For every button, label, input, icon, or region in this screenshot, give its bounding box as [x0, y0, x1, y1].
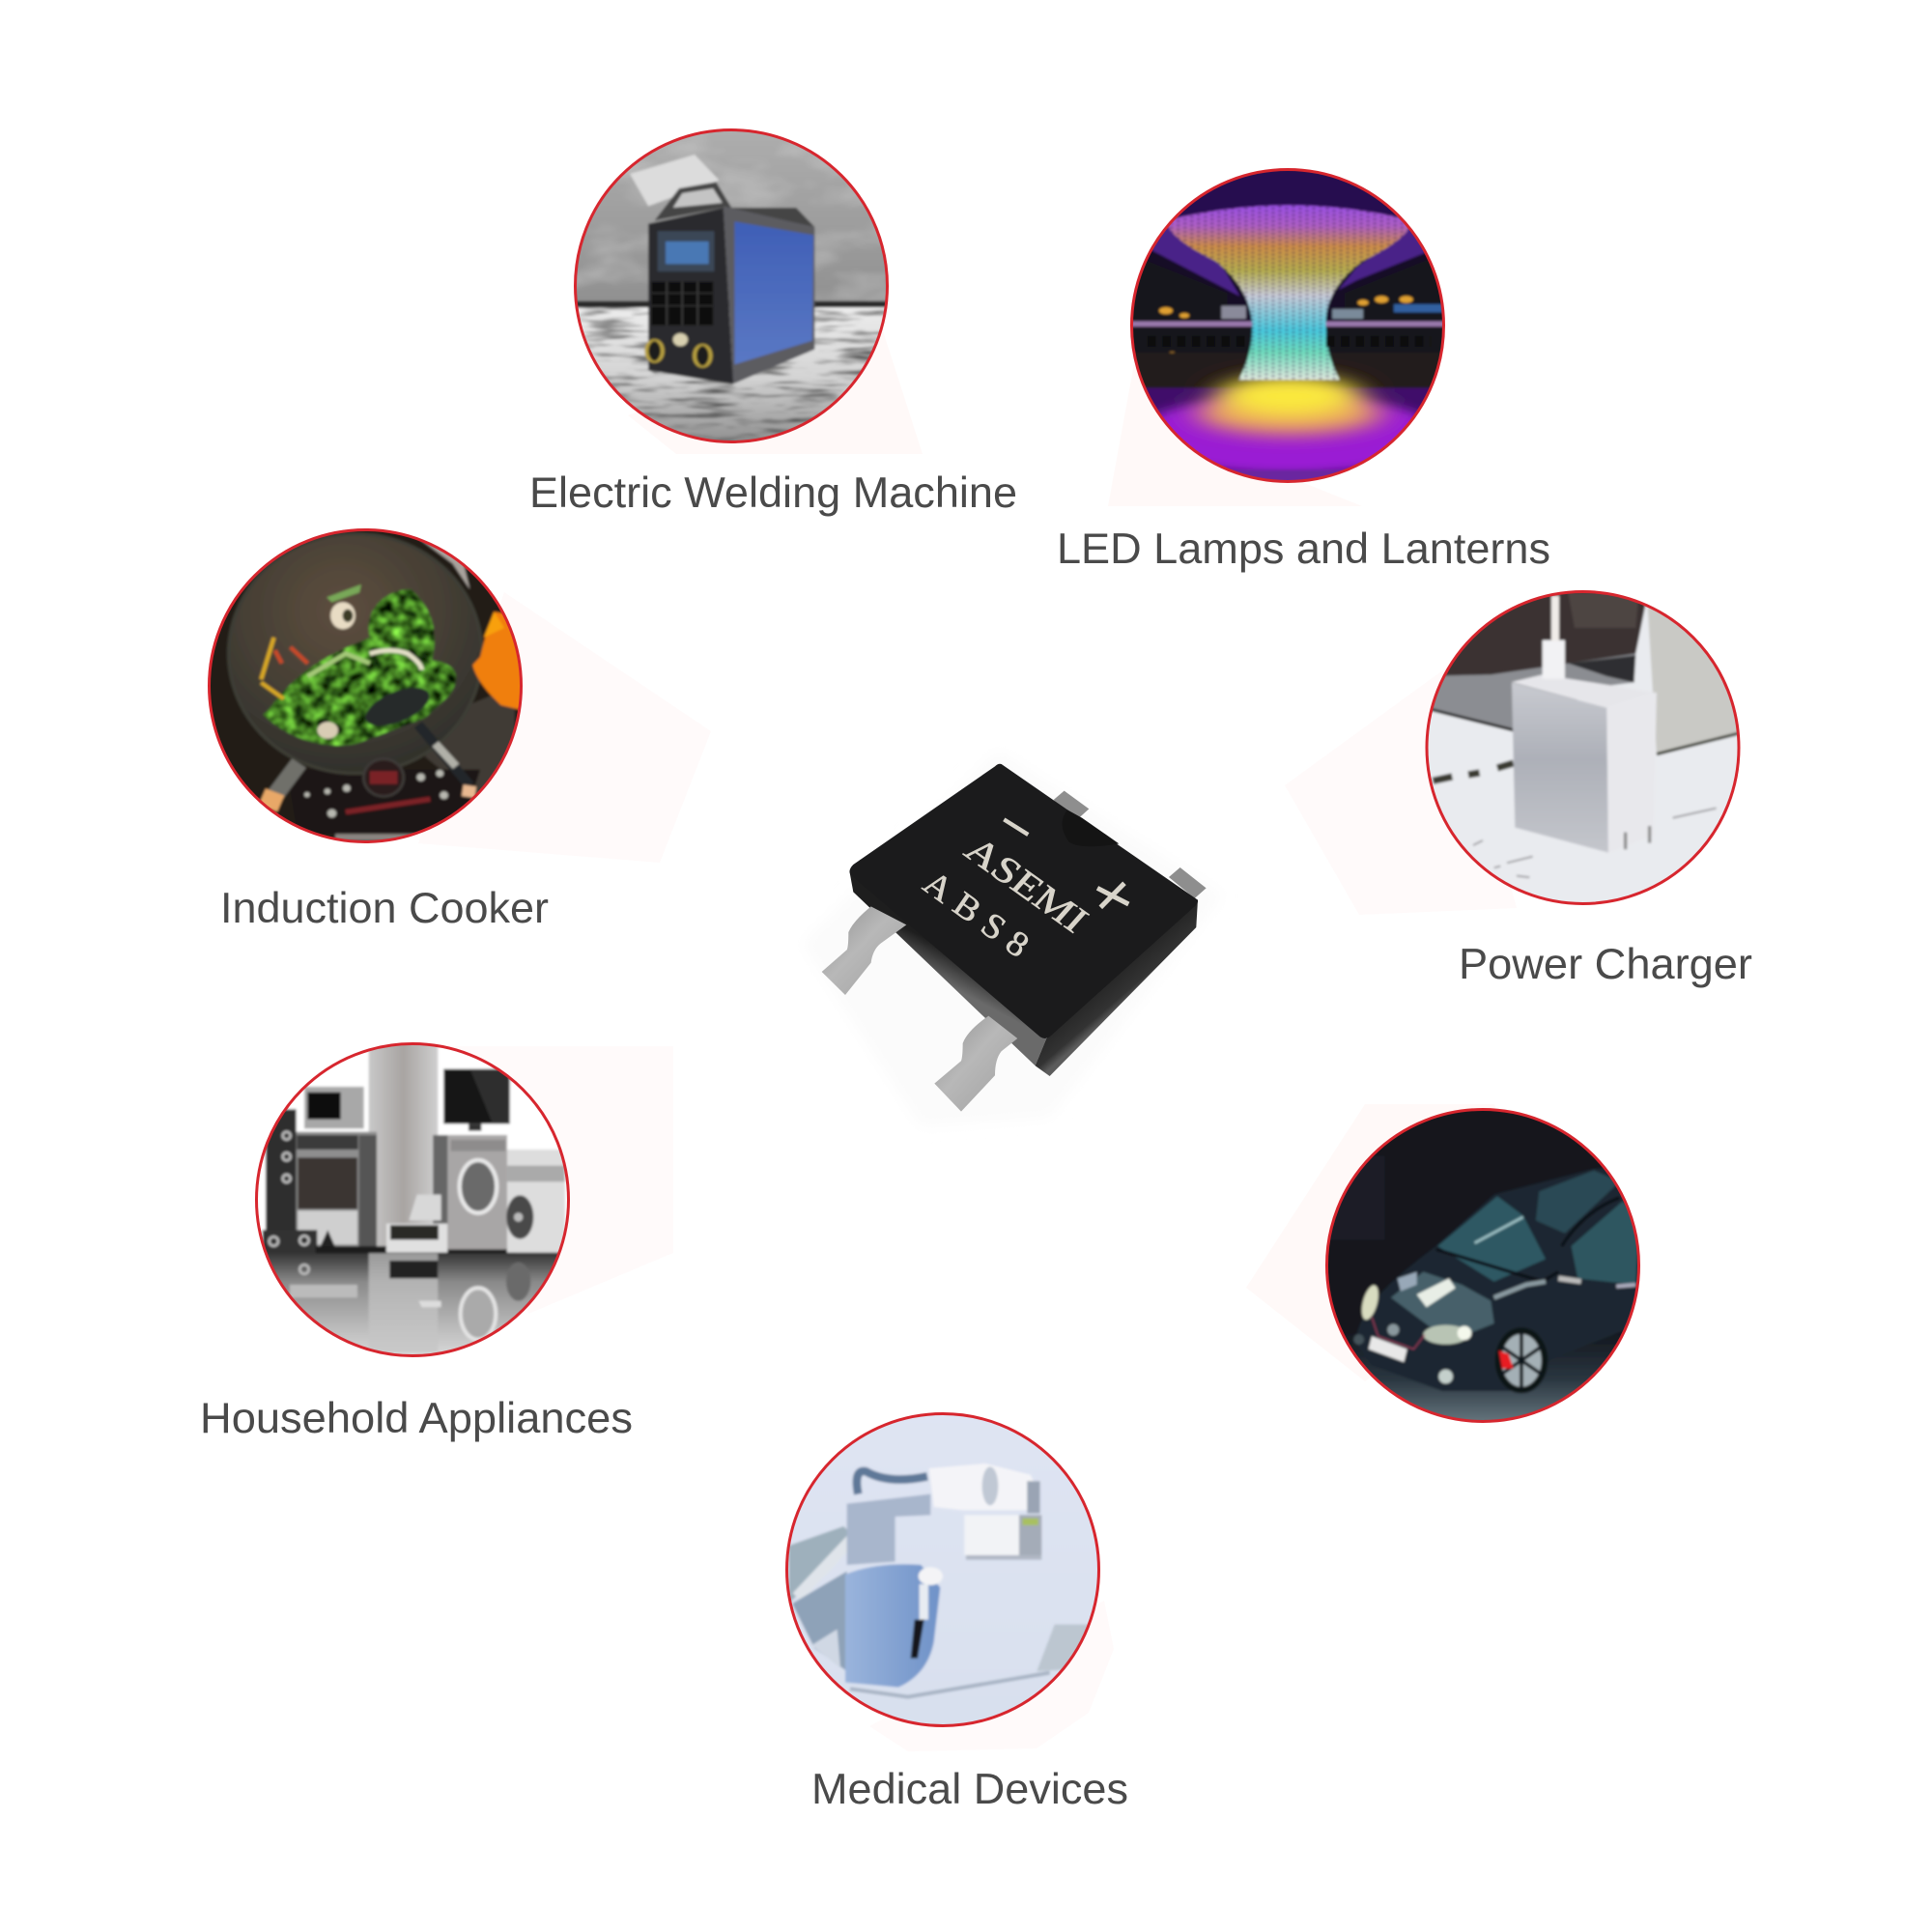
panel: Induction Cooker — [208, 528, 549, 923]
panel: Power Charger — [1426, 590, 1752, 987]
photo: LED funnel — [1122, 167, 1449, 490]
brand text: ASEMI — [956, 830, 1096, 941]
photo: cutaway car — [1323, 1108, 1642, 1423]
corner notch — [1063, 810, 1119, 846]
red ring — [1132, 170, 1443, 481]
photo: white charger — [1423, 589, 1746, 911]
red ring — [257, 1043, 568, 1356]
label: Power Charger — [1459, 941, 1752, 988]
pink shadow — [628, 319, 923, 454]
top face — [850, 764, 1198, 1038]
panel: Automotive — [1325, 1108, 1640, 1423]
back leads — [1054, 791, 1207, 898]
panel: Electric Welding Machine — [529, 126, 1017, 517]
pink shadow — [451, 1046, 673, 1314]
plus mark — [1097, 883, 1128, 907]
soft floor shadow — [802, 751, 1224, 1127]
photo: welding machine — [568, 126, 895, 446]
red ring — [576, 129, 887, 442]
pink shadow — [869, 1601, 1114, 1751]
front left lead — [822, 906, 906, 995]
front right lead — [934, 1016, 1017, 1112]
red ring — [1427, 591, 1739, 904]
label: Medical Devices — [811, 1766, 1128, 1813]
photo: wok on induction cooker — [204, 525, 528, 847]
photo: appliances — [254, 1041, 573, 1360]
label: Electric Welding Machine — [529, 469, 1017, 517]
pink shadow — [1246, 1104, 1546, 1381]
label: Induction Cooker — [220, 885, 549, 932]
red ring — [1327, 1109, 1638, 1422]
panel: Medical Devices — [782, 1408, 1128, 1813]
label: LED Lamps and Lanterns — [1057, 526, 1550, 573]
minus mark — [1004, 819, 1028, 835]
package body — [849, 871, 1046, 1065]
photo: medical X-ray device — [782, 1408, 1104, 1731]
red ring — [786, 1414, 1099, 1725]
panel: LED Lamps and Lanterns — [1057, 167, 1550, 573]
label: Household Appliances — [200, 1395, 633, 1442]
product: ASEMI ABS8 bridge rectifier chip — [802, 751, 1224, 1127]
red ring — [209, 529, 522, 842]
pink shadow — [418, 592, 711, 863]
pink shadow — [1108, 348, 1362, 506]
model text: ABS8 — [916, 864, 1043, 971]
pink shadow — [1285, 664, 1517, 915]
panel: Household Appliances — [200, 1041, 673, 1442]
